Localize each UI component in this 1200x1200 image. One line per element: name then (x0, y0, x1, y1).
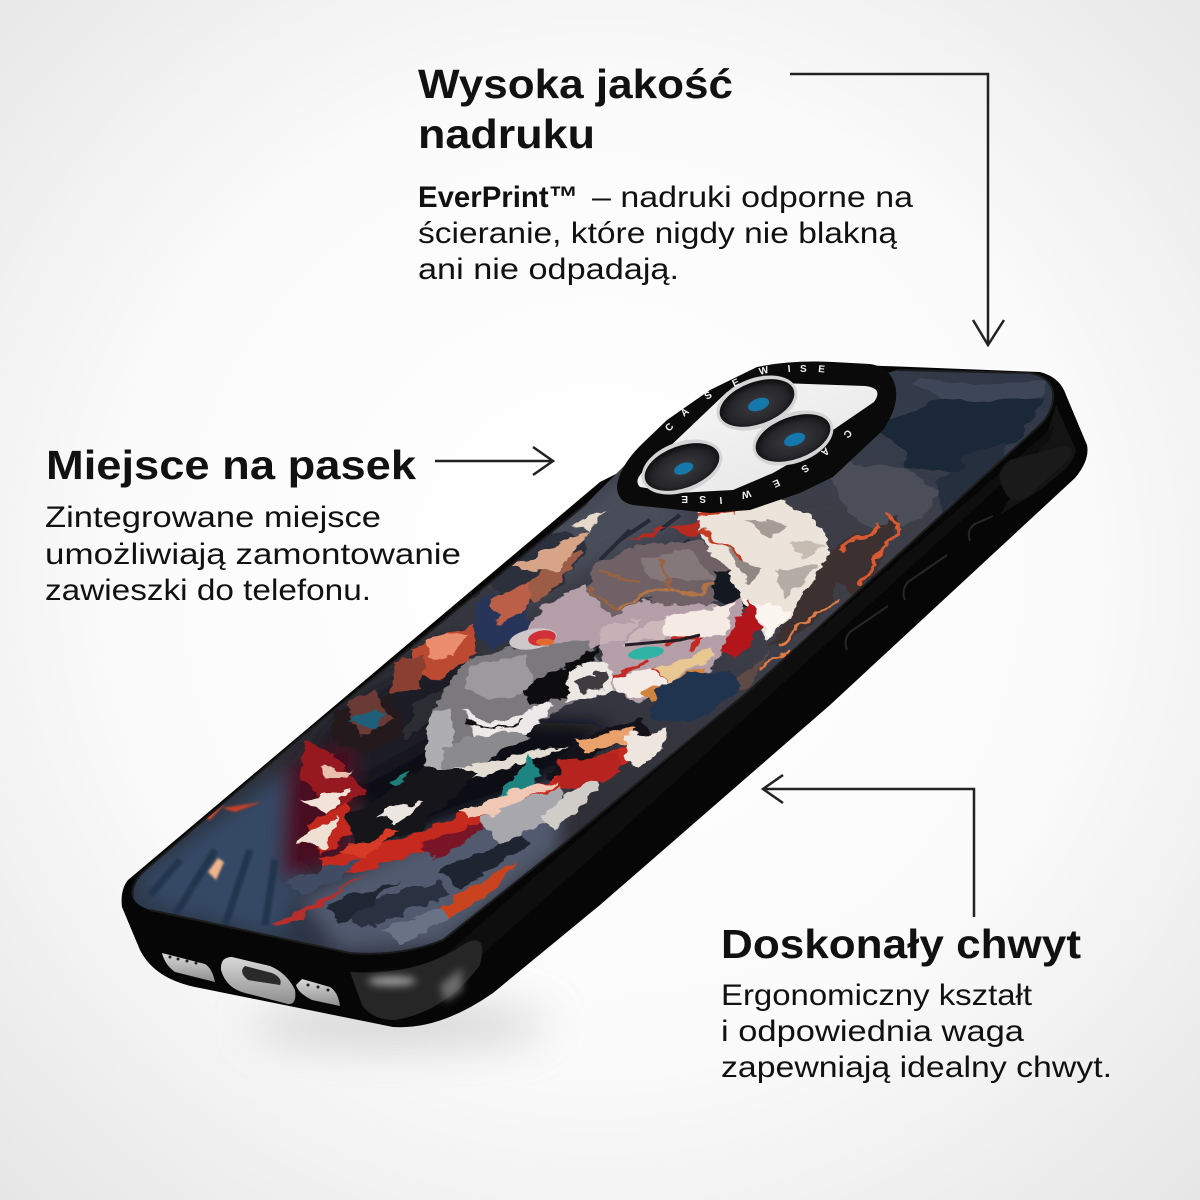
callout: print quality (418, 61, 913, 286)
ring lettering (663, 364, 854, 505)
volume up button (904, 555, 947, 600)
ring lettering: W (740, 487, 752, 500)
red lining (722, 600, 760, 660)
teal eye (625, 635, 700, 661)
ring lettering: C (663, 421, 676, 434)
heading: print quality: nadruku (418, 111, 595, 157)
text: strap mount (45, 501, 461, 607)
jaw lower (440, 730, 532, 770)
volume down button (846, 606, 888, 650)
speaker right (296, 979, 340, 1006)
text: grip: zapewniają idealny chwyt. (721, 1051, 1112, 1084)
camera control button (999, 447, 1072, 500)
gray lower strips (480, 785, 565, 845)
text: strap mount: umożliwiają zamontowanie (45, 538, 461, 571)
face light patches (660, 603, 735, 640)
heading: grip: Doskonały chwyt (721, 921, 1081, 967)
text: print quality: ścieranie, które nigdy nie blakną (418, 217, 897, 250)
ring lettering: I (719, 494, 723, 505)
small side button (969, 516, 993, 541)
heading: strap mount: Miejsce na pasek (46, 442, 416, 488)
text: print quality: EverPrint™ (418, 181, 578, 214)
text: strap mount: zawieszki do telefonu. (45, 574, 371, 607)
left jaw (425, 705, 452, 778)
cloak shadow folds (745, 520, 790, 540)
eye socket (523, 648, 600, 706)
dark lower face (272, 668, 740, 945)
art base (133, 370, 1052, 953)
charging port (221, 957, 295, 1004)
skull (425, 640, 612, 775)
ring lettering: S (703, 390, 715, 403)
lens left (634, 429, 730, 505)
art colour fields (142, 486, 678, 952)
callout: grip (721, 921, 1112, 1084)
teeth (462, 701, 554, 738)
ring lettering: A (819, 445, 831, 458)
ring lettering: E (731, 377, 742, 390)
arrow: print quality (790, 74, 1004, 345)
cloak folds blue (150, 850, 275, 925)
ring lettering: E (681, 493, 688, 504)
embers on cloak right (770, 515, 900, 650)
artwork rim (132, 370, 1053, 954)
lower side band (445, 425, 1055, 965)
phone case (100, 340, 1100, 1027)
white cloak (697, 497, 830, 642)
night clouds (830, 375, 1040, 540)
text: print quality: ani nie odpadają. (418, 253, 679, 286)
lens right (745, 400, 841, 476)
ring lettering: E (770, 476, 781, 489)
fire fragments and embers (295, 512, 605, 855)
case body (122, 364, 1088, 1027)
arrow: grip (763, 775, 974, 917)
buttons (846, 516, 993, 650)
hood lines (600, 515, 690, 560)
ring lettering: S (699, 493, 706, 504)
text: grip: Ergonomiczny kształt (721, 979, 1033, 1012)
ring lettering: I (787, 364, 791, 375)
camera plate (637, 383, 877, 493)
ring lettering: W (758, 365, 770, 378)
heading: print quality: Wysoka jakość (418, 61, 733, 107)
ring lettering: C (841, 427, 854, 440)
text: print quality (418, 181, 913, 286)
ring lettering: E (818, 364, 826, 376)
callout: strap mount (45, 442, 461, 607)
arrow: strap mount (435, 447, 553, 475)
lens top (709, 365, 805, 441)
ring lettering: S (800, 364, 807, 375)
camera module (617, 362, 896, 513)
text: strap mount: Zintegrowane miejsce (45, 501, 381, 534)
speaker left (162, 953, 215, 982)
nose bones (565, 660, 612, 702)
text: grip (721, 979, 1112, 1084)
gold strands (655, 645, 715, 682)
red streak main (317, 738, 668, 878)
embers blue area (200, 802, 262, 880)
text: print quality: – nadruki odporne na (592, 181, 913, 214)
phone shadow (250, 1003, 550, 1047)
ring lettering: A (679, 406, 691, 419)
red face marks (610, 640, 700, 690)
text: grip: i odpowiednia waga (721, 1015, 1024, 1048)
camera ring (617, 362, 896, 513)
hair and hood (425, 497, 900, 785)
dark hair right (715, 570, 748, 610)
red eye (509, 628, 557, 650)
ring lettering: S (799, 462, 811, 475)
printed artwork (133, 370, 1052, 953)
heading: print quality (418, 61, 733, 157)
side edge sheen (1000, 405, 1076, 515)
teal fragments (498, 754, 542, 798)
lower corner sheen (350, 940, 482, 1020)
light streak (452, 746, 569, 778)
face (520, 585, 745, 702)
